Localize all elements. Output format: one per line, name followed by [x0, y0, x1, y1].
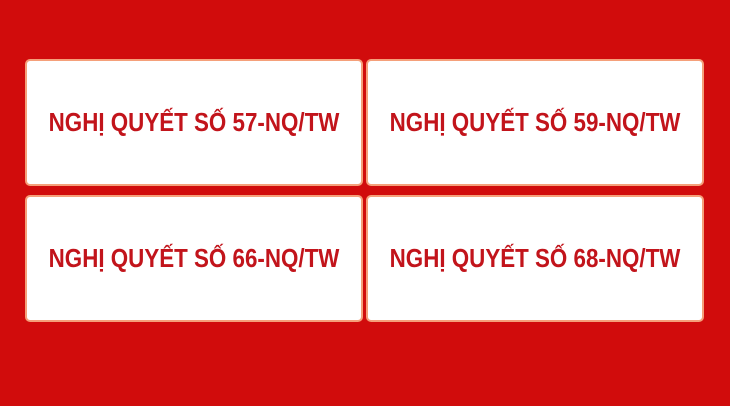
panel: resolution 59	[366, 59, 704, 186]
panel: resolution 57	[25, 59, 363, 186]
heading 57: NGHỊ QUYẾT SỐ 57-NQ/TW	[49, 107, 339, 137]
panel: resolution 66	[25, 195, 363, 322]
panel: resolution 68	[366, 195, 704, 322]
heading 66: NGHỊ QUYẾT SỐ 66-NQ/TW	[49, 243, 339, 273]
heading 59: NGHỊ QUYẾT SỐ 59-NQ/TW	[390, 107, 680, 137]
heading 68: NGHỊ QUYẾT SỐ 68-NQ/TW	[390, 243, 680, 273]
